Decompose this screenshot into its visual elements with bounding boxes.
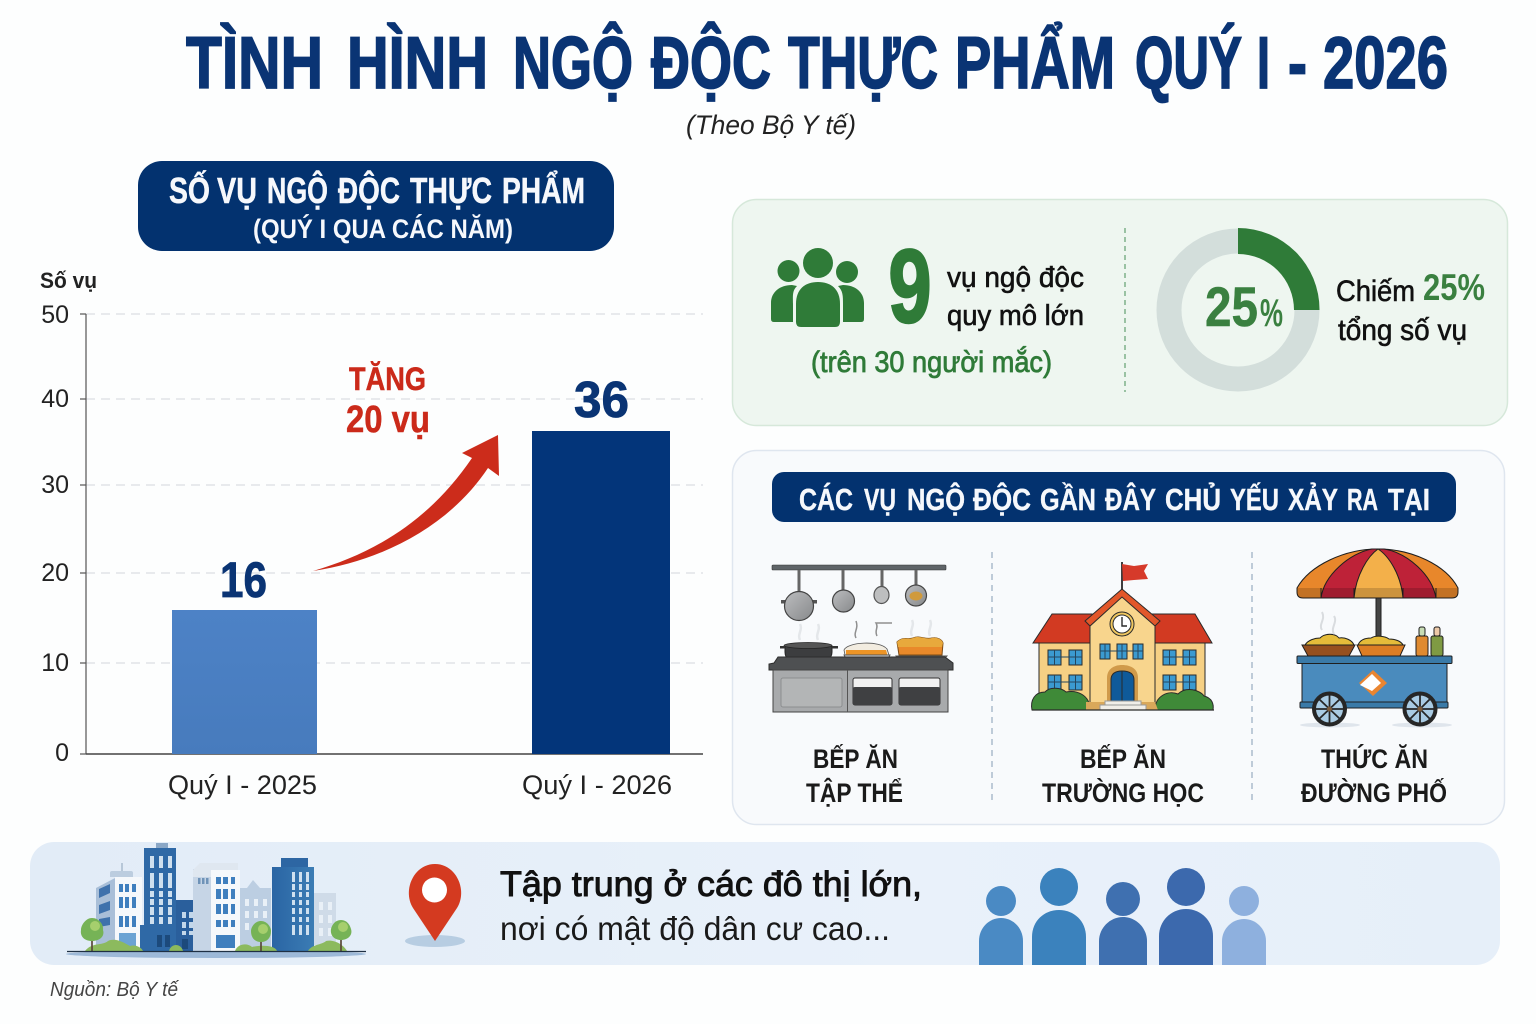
icon: people group — [771, 248, 864, 327]
heading pill: YẾU — [1230, 482, 1279, 517]
label: street food — [1301, 743, 1447, 808]
panel: large outbreak stats — [732, 200, 1508, 426]
label: collective kitchen: TẬP THỂ — [806, 777, 903, 808]
title: NGỘ — [513, 23, 633, 104]
callout: increase by 20 — [346, 361, 430, 441]
source note: Nguồn: Bộ Y tế — [50, 979, 180, 1001]
heading pill: XẢY — [1288, 482, 1338, 517]
panel: chart heading: PHẨM — [502, 169, 585, 211]
title: ĐỘC — [651, 23, 771, 104]
text: share of total: Chiếm — [1336, 275, 1415, 308]
bar chart: 36 — [574, 371, 629, 428]
title — [186, 23, 1448, 104]
text: large-scale cases — [947, 262, 1084, 332]
text: concentrated in big cities: Tập trung ở các đô thị lớn, — [500, 865, 922, 904]
label: street food: ĐƯỜNG PHỐ — [1301, 776, 1447, 808]
title: PHẨM — [955, 23, 1115, 104]
title: THỰC — [788, 23, 938, 104]
bar chart: Số vụ — [40, 268, 97, 293]
text: concentrated in big cities — [500, 865, 922, 947]
icon: crowd of people — [979, 868, 1266, 965]
panel: chart heading: (QUÝ I QUA CÁC NĂM) — [253, 213, 513, 244]
big number 9: 9 — [888, 229, 932, 345]
heading pill: GẦN — [1040, 482, 1096, 517]
panel: urban concentration band — [30, 842, 1500, 965]
panel: chart heading: ĐỘC — [338, 169, 400, 211]
icon: street food cart — [1297, 549, 1458, 728]
title: I — [1257, 23, 1270, 104]
text: share of total: tổng số vụ — [1338, 314, 1467, 347]
label: school kitchen: TRƯỜNG HỌC — [1042, 777, 1204, 808]
text: share of total — [1336, 267, 1485, 347]
heading pill: CHỦ — [1165, 481, 1221, 517]
text: large-scale cases: vụ ngộ độc — [947, 262, 1084, 294]
heading pill: ĐÂY — [1105, 481, 1156, 517]
panel: chart heading: NGỘ — [267, 169, 328, 211]
title: - — [1288, 23, 1307, 104]
bar chart: 30 — [41, 471, 69, 499]
bar chart: Quý I - 2026 — [522, 770, 672, 800]
icon: collective kitchen — [769, 565, 953, 712]
bar chart: 0 — [55, 739, 69, 767]
label: collective kitchen: BẾP ĂN — [813, 743, 898, 774]
donut chart: 25%: % — [1260, 292, 1283, 335]
panel: chart heading: THỰC — [410, 170, 492, 211]
bar chart: 40 — [41, 385, 69, 413]
bar chart: 50 — [41, 301, 69, 329]
heading pill: ĐỘC — [973, 481, 1031, 517]
callout: increase by 20: TĂNG — [349, 361, 426, 397]
callout: increase by 20: 20 vụ — [346, 399, 430, 441]
text: share of total: 25% — [1423, 267, 1485, 308]
subtitle: (Theo Bộ Y tế) — [686, 110, 856, 140]
text: large-scale cases: quy mô lớn — [947, 300, 1084, 332]
panel: chart heading: VỤ — [217, 170, 257, 211]
text: concentrated in big cities: nơi có mật độ dân cư cao... — [500, 910, 890, 947]
panel: chart heading: SỐ — [169, 169, 210, 211]
heading pill: TẠI — [1388, 482, 1430, 517]
heading pill — [772, 472, 1456, 522]
title: TÌNH — [186, 23, 323, 104]
text: over 30 people: (trên 30 người mắc) — [811, 346, 1052, 379]
bar chart: 20 — [41, 559, 69, 587]
label: school kitchen — [1042, 743, 1204, 808]
bar chart: 16 — [220, 552, 267, 608]
panel: chart heading — [138, 161, 614, 251]
title: 2026 — [1323, 23, 1448, 104]
label: street food: THỨC ĂN — [1321, 743, 1428, 774]
bar chart: Quý I - 2025 — [168, 770, 317, 800]
donut chart: 25% — [1169, 228, 1320, 379]
bar chart: 10 — [41, 649, 69, 677]
title: QUÝ — [1135, 23, 1242, 104]
icon: location pin — [405, 864, 465, 947]
icon: city skyline — [66, 843, 366, 958]
icon: school — [1032, 562, 1214, 710]
bar chart — [40, 268, 703, 800]
panel: where outbreaks occur — [732, 450, 1504, 824]
donut chart: 25%: 25 — [1205, 275, 1258, 338]
title: HÌNH — [347, 23, 488, 104]
arrow: rising — [313, 435, 499, 571]
heading pill: NGỘ — [907, 481, 965, 517]
label: collective kitchen — [806, 743, 903, 808]
heading pill: CÁC — [799, 482, 853, 517]
label: school kitchen: BẾP ĂN — [1080, 743, 1166, 774]
heading pill: RA — [1347, 482, 1378, 517]
heading pill: VỤ — [864, 482, 896, 517]
